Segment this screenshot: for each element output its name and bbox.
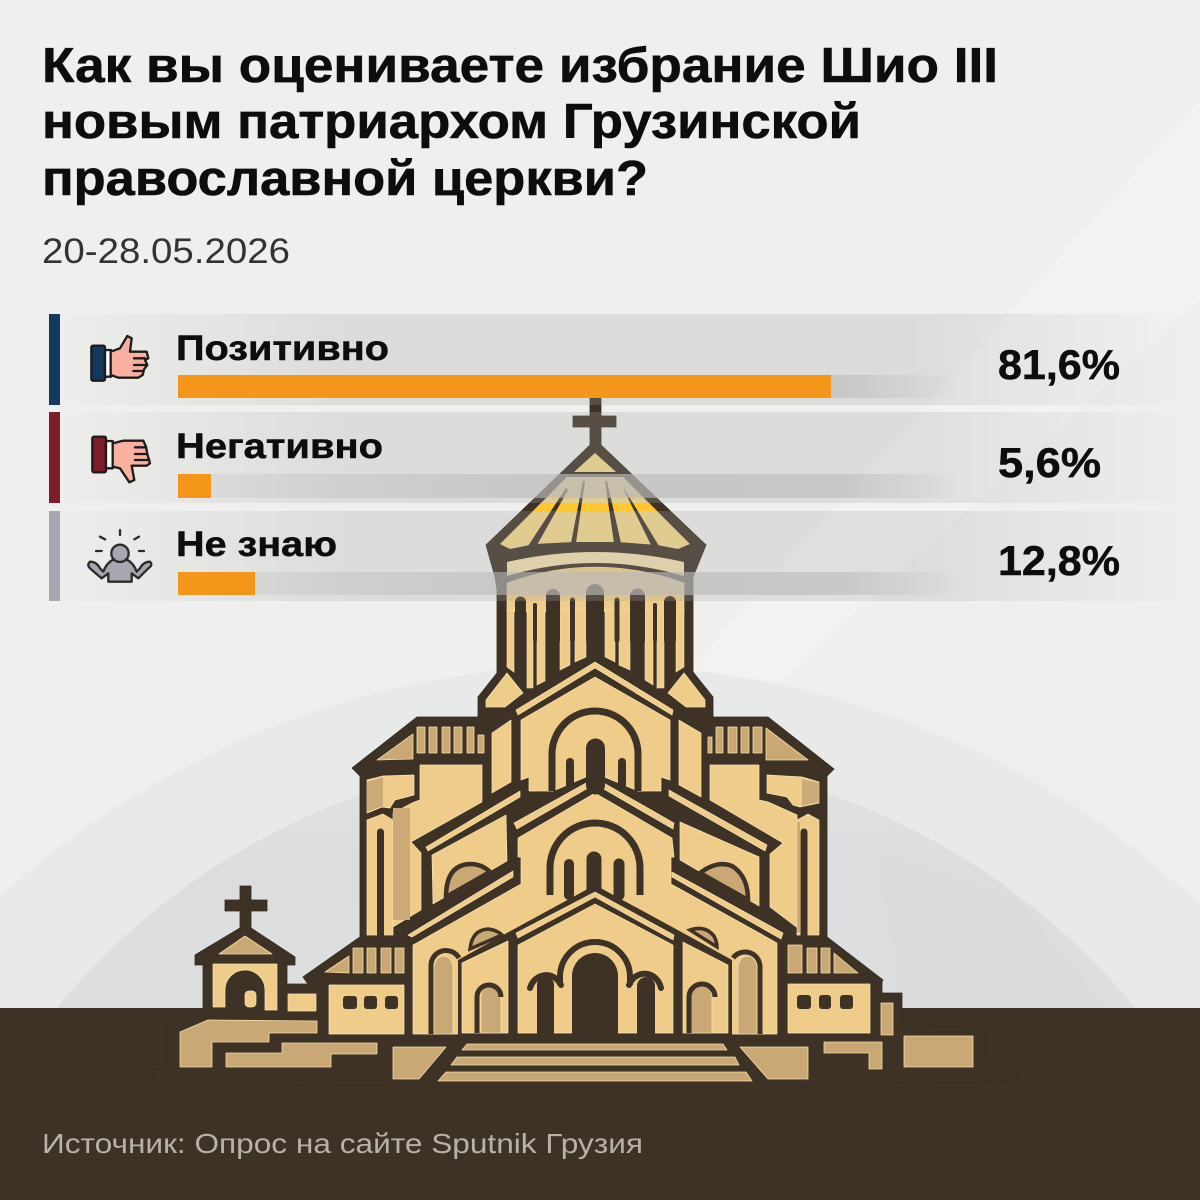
tall arch interiors bbox=[434, 956, 453, 1034]
upper wall bbox=[521, 677, 670, 791]
title: православной церкви? bbox=[42, 152, 648, 206]
lower centre wall bbox=[518, 904, 673, 1033]
value: 81,6%: 81,6% bbox=[998, 341, 1120, 388]
icon: shrugging person bbox=[88, 530, 151, 582]
lower side walls bbox=[462, 941, 508, 1033]
label: Не знаю: Не знаю bbox=[176, 525, 337, 564]
stairs bbox=[462, 1044, 727, 1050]
light wall shapes bbox=[367, 662, 819, 1034]
upper side strips bbox=[492, 720, 701, 797]
tan tier details bbox=[180, 727, 973, 1081]
panel: row Позитивно bbox=[49, 314, 1200, 405]
icon: thumb down bbox=[92, 437, 150, 482]
illustration: cathedral bbox=[154, 398, 1018, 1093]
label: Позитивно: Позитивно bbox=[176, 329, 389, 368]
lattice lower left bbox=[353, 948, 404, 973]
panel: row Негативно bbox=[49, 412, 1200, 503]
doors and windows bbox=[343, 953, 853, 1036]
panel: row Не знаю bbox=[49, 511, 1200, 601]
lattice upper right bbox=[708, 727, 762, 753]
chapel wall bbox=[213, 964, 277, 1010]
half arches lower bbox=[470, 928, 717, 949]
lower tier bbox=[213, 892, 870, 1034]
door interiors bbox=[481, 985, 501, 1033]
ground band bbox=[0, 1008, 1200, 1200]
value: 5,6%: 5,6% bbox=[998, 439, 1101, 486]
bar: Негативно 5,6% bbox=[178, 474, 211, 498]
drum corner gables bbox=[486, 673, 705, 707]
middle wall bbox=[413, 793, 777, 1034]
base side blocks bbox=[329, 985, 404, 1034]
title bbox=[42, 39, 998, 206]
lower gable strip bbox=[516, 892, 674, 940]
lattice upper left bbox=[417, 727, 484, 753]
bar: Не знаю 12,8% bbox=[178, 572, 255, 595]
cathedral silhouette bbox=[154, 398, 1018, 1093]
lower centre chevron bbox=[458, 885, 732, 1036]
second tier roof strips bbox=[426, 790, 767, 851]
third tier roof strips bbox=[408, 871, 783, 939]
corner blocks bbox=[367, 775, 414, 813]
base platforms bbox=[180, 1020, 317, 1067]
bar: Позитивно 81,6% bbox=[178, 375, 831, 398]
middle gable strip bbox=[514, 778, 674, 829]
icon: thumb up bbox=[91, 336, 148, 381]
half arches bbox=[446, 864, 748, 900]
outer columns bbox=[367, 814, 393, 935]
title: Как вы оцениваете избрание Шио III bbox=[42, 39, 998, 93]
chapel roof bbox=[219, 936, 272, 954]
value: 12,8%: 12,8% bbox=[998, 537, 1120, 584]
title: новым патриархом Грузинской bbox=[42, 95, 861, 149]
lattice lower right bbox=[788, 945, 830, 973]
side walls bbox=[393, 765, 482, 927]
upper gable strip bbox=[516, 662, 673, 715]
dome bbox=[500, 453, 690, 576]
second tier walls bbox=[432, 815, 507, 904]
tan shading bbox=[367, 777, 819, 932]
source: Источник: Опрос на сайте Sputnik Грузия bbox=[42, 1128, 643, 1159]
arches and slits of upper tiers bbox=[380, 711, 804, 935]
lower arches and doors bbox=[431, 942, 760, 1034]
label: Негативно: Негативно bbox=[176, 427, 383, 466]
date: 20-28.05.2026 bbox=[42, 232, 290, 271]
drum with arched columns bbox=[507, 567, 684, 688]
